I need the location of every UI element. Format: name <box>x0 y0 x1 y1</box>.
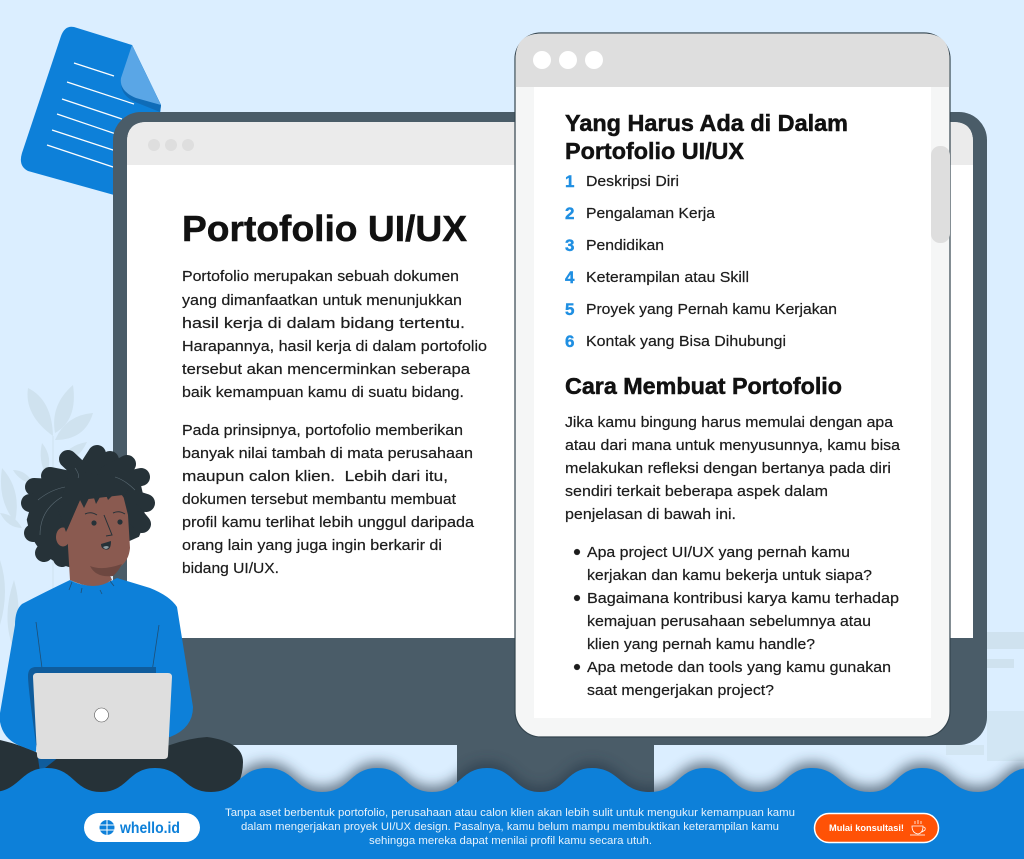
heading: yang harus ada: Portofolio UI/UX <box>565 138 745 164</box>
numbered list: 5 <box>565 300 574 319</box>
numbered list: Keterampilan atau Skill <box>586 269 749 286</box>
browser window panel <box>515 33 950 737</box>
left text block: orang lain yang juga ingin berkarir di <box>182 537 442 554</box>
paragraph: cara membuat: melakukan refleksi dengan bertanya pada diri <box>565 460 891 477</box>
left text block: banyak nilai tambah di mata perusahaan <box>182 445 473 462</box>
background pale blocks right <box>946 632 1024 761</box>
left text block: dokumen tersebut membantu membuat <box>182 491 457 508</box>
heading: yang harus ada <box>565 110 848 164</box>
legs <box>0 737 243 800</box>
logo pill <box>84 813 200 842</box>
paragraph: cara membuat: Jika kamu bingung harus memulai dengan apa <box>565 414 894 431</box>
bullet list: saat mengerjakan project? <box>587 682 774 699</box>
numbered list: Pendidikan <box>586 237 664 254</box>
left text block: yang dimanfaatkan untuk menunjukkan <box>182 292 462 309</box>
footer text: Tanpa aset berbentuk portofolio, perusahaan atau calon klien akan lebih sulit untuk mengukur kemampuan kamu <box>225 807 795 819</box>
left text block: hasil kerja di dalam bidang tertentu. <box>182 315 465 332</box>
numbered list: 1 <box>565 172 574 191</box>
paragraph: cara membuat: atau dari mana untuk menyusunnya, kamu bisa <box>565 437 901 454</box>
hair back <box>30 454 146 558</box>
heading: cara membuat: Cara Membuat Portofolio <box>565 373 842 399</box>
wave shadow <box>0 762 1024 853</box>
footer text: dalam mengerjakan proyek UI/UX design. Pasalnya, kamu belum mampu membuktikan keterampilan kamu <box>241 821 779 833</box>
bangs <box>58 470 132 532</box>
laptop shadow <box>28 667 156 772</box>
left text block: profil kamu terlihat lebih unggul daripada <box>182 514 475 531</box>
numbered list: Proyek yang Pernah kamu Kerjakan <box>586 301 837 318</box>
numbered list <box>565 172 837 351</box>
laptop logo <box>94 708 108 722</box>
footer band <box>0 768 1024 859</box>
sweater <box>0 578 193 752</box>
numbered list: 6 <box>565 332 574 351</box>
left text block: Portofolio merupakan sebuah dokumen <box>182 268 459 285</box>
footer text <box>225 807 795 847</box>
numbered list: 2 <box>565 204 574 223</box>
bullet list: Apa metode dan tools yang kamu gunakan <box>587 659 891 676</box>
bullet list: kemajuan perusahaan sebelumnya atau <box>587 613 871 630</box>
cta button <box>814 814 938 842</box>
background leaves <box>0 385 93 645</box>
left text block: maupun calon klien. Lebih dari itu, <box>182 468 448 485</box>
left text block: tersebut akan mencerminkan seberapa <box>182 361 471 378</box>
numbered list: Deskripsi Diri <box>586 173 679 190</box>
icon: coffee cup <box>910 820 925 835</box>
bullet list: Apa project UI/UX yang pernah kamu <box>587 544 850 561</box>
left text block: bidang UI/UX. <box>182 560 279 577</box>
cta button: Mulai konsultasi! <box>829 823 904 834</box>
left text block <box>182 268 487 577</box>
numbered list: 3 <box>565 236 574 255</box>
sweater fold lines <box>36 581 159 672</box>
monitor <box>113 112 987 745</box>
character: person with laptop <box>0 454 243 800</box>
title: Portofolio UI/UX <box>182 208 467 249</box>
numbered list: 4 <box>565 268 575 287</box>
bullet list: kerjakan dan kamu bekerja untuk siapa? <box>587 567 872 584</box>
facial features <box>85 512 125 550</box>
paragraph: cara membuat: sendiri terkait beberapa aspek dalam <box>565 483 828 500</box>
chin shadow <box>90 564 122 576</box>
laptop <box>33 673 172 759</box>
bullet list: Bagaimana kontribusi karya kamu terhadap <box>587 590 899 607</box>
paragraph: cara membuat: penjelasan di bawah ini. <box>565 506 736 523</box>
numbered list: Kontak yang Bisa Dihubungi <box>586 333 786 350</box>
left text block: Harapannya, hasil kerja di dalam portofolio <box>182 338 487 355</box>
paragraph: cara membuat <box>565 414 901 523</box>
footer text: sehingga mereka dapat menilai profil kamu secara utuh. <box>369 835 652 847</box>
logo pill: whello.id <box>119 820 180 837</box>
left text block: baik kemampuan kamu di suatu bidang. <box>182 384 464 401</box>
numbered list: Pengalaman Kerja <box>586 205 716 222</box>
heading: yang harus ada: Yang Harus Ada di Dalam <box>565 110 848 136</box>
icon: document <box>21 27 161 205</box>
ear <box>56 528 70 546</box>
hair strands <box>38 468 135 535</box>
left text block: Pada prinsipnya, portofolio memberikan <box>182 422 463 439</box>
monitor stand <box>457 730 654 800</box>
bullet list <box>574 544 899 699</box>
neck and face <box>67 495 130 586</box>
bullet list: klien yang pernah kamu handle? <box>587 636 815 653</box>
